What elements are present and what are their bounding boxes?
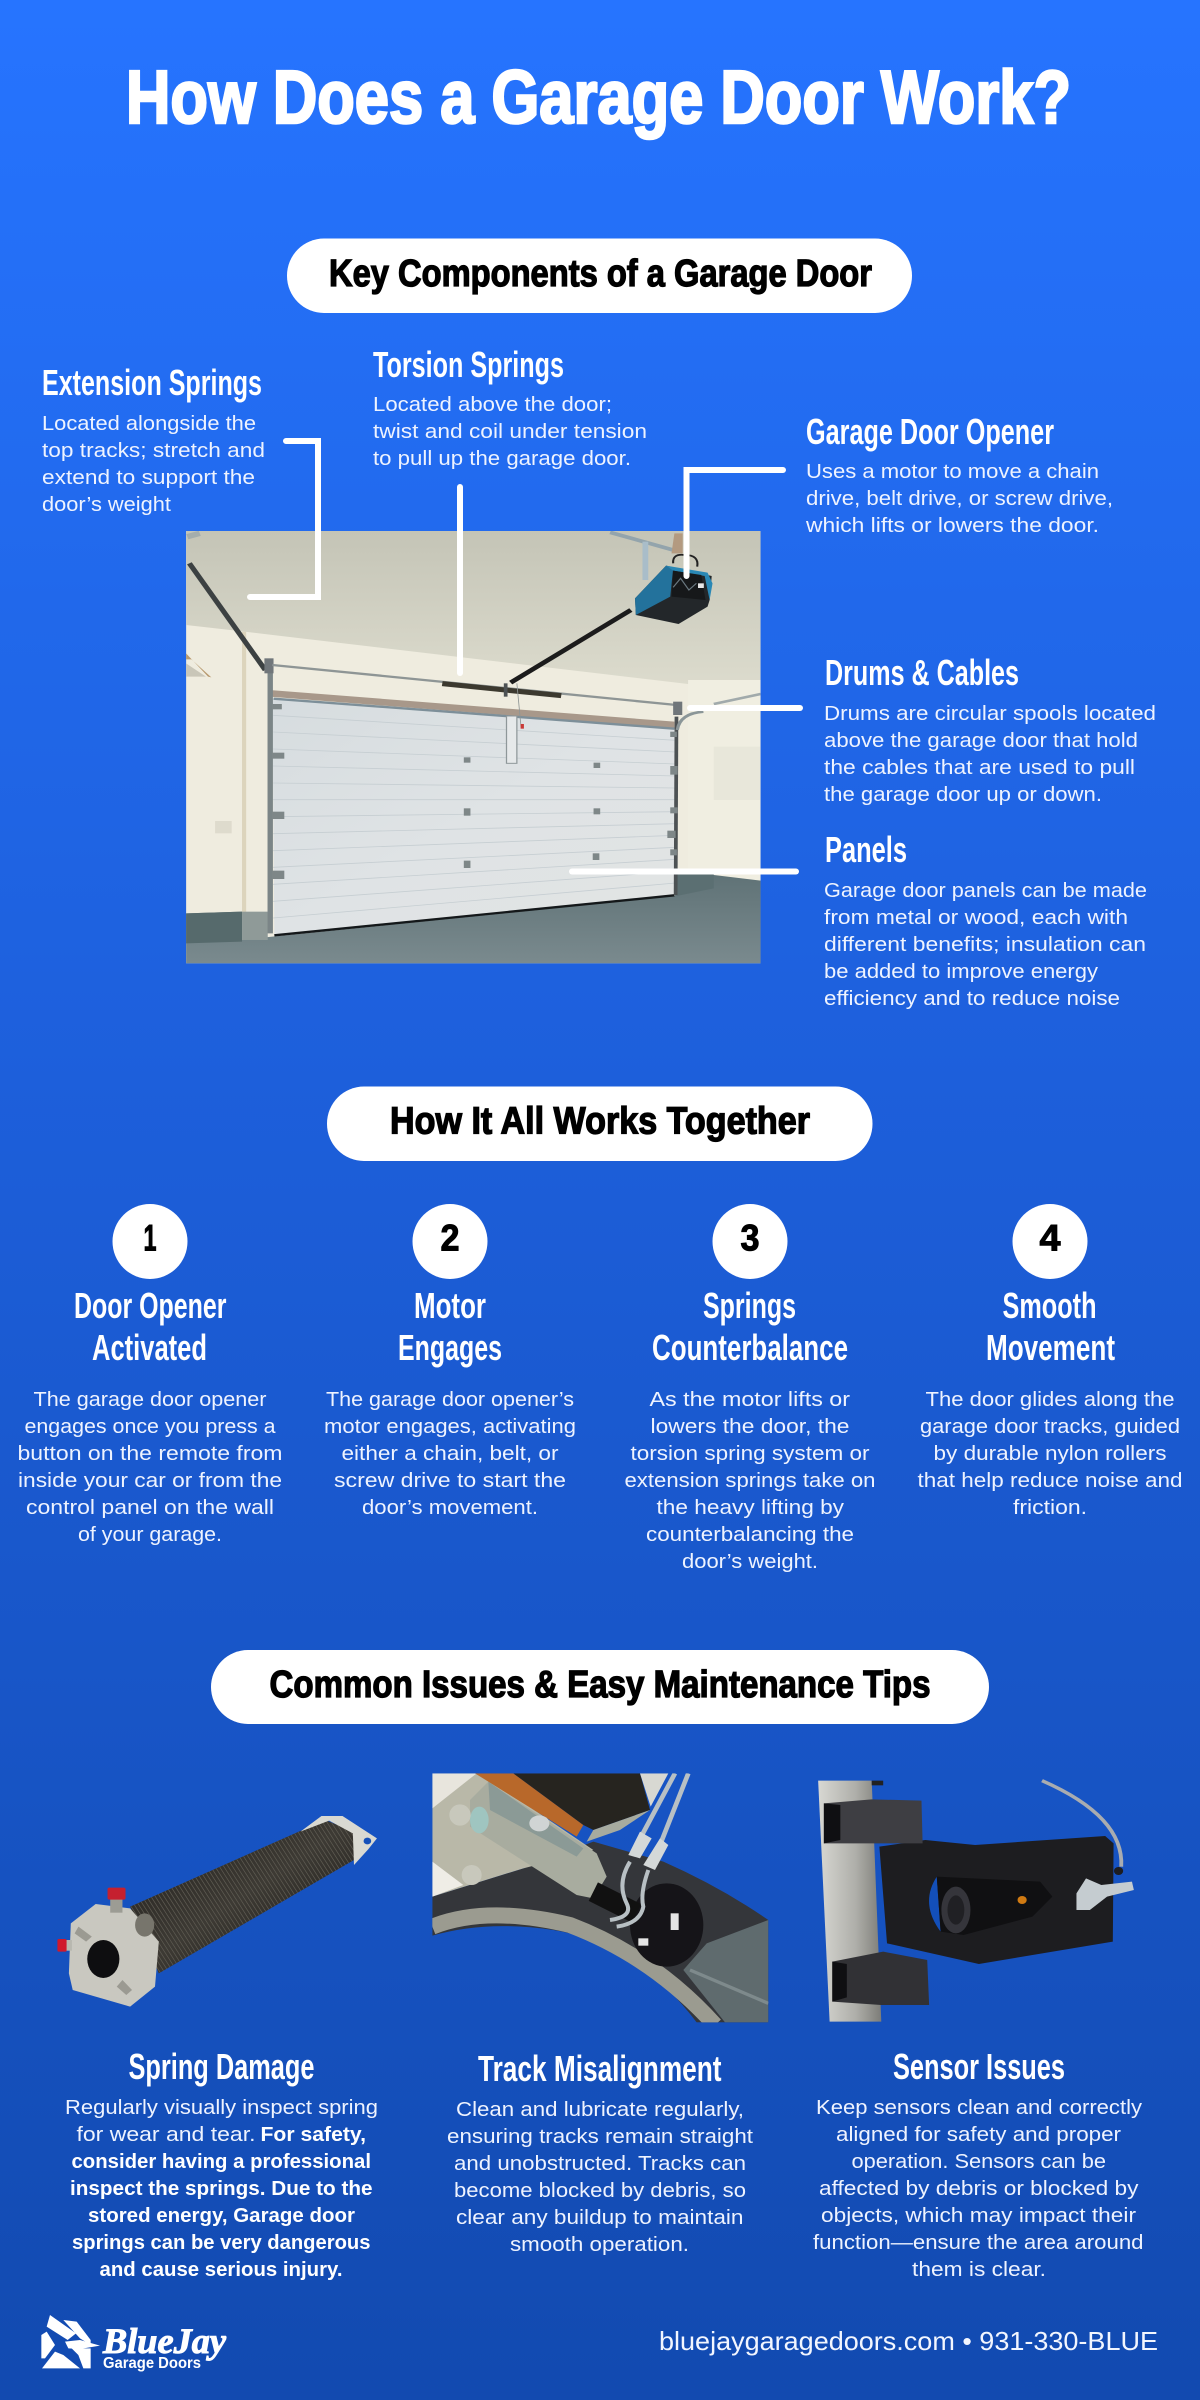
step 1 text: button on the remote from bbox=[18, 1443, 282, 1465]
tip: spring damage: inspect the springs. Due to the bbox=[70, 2178, 372, 2200]
step 2 text: screw drive to start the bbox=[334, 1470, 566, 1492]
step 2 heading bbox=[398, 1285, 502, 1368]
step 2 text bbox=[324, 1389, 576, 1519]
component: garage door opener bbox=[805, 411, 1113, 537]
tip: spring damage: Regularly visually inspect spring bbox=[65, 2097, 378, 2119]
tip: sensor issues: Sensor Issues bbox=[893, 2046, 1065, 2087]
component: torsion springs: Torsion Springs bbox=[373, 344, 564, 385]
component: extension springs bbox=[42, 362, 265, 516]
tip: track misalignment: ensuring tracks remain straight bbox=[447, 2126, 753, 2148]
contact line: bluejaygaragedoors.com • 931-330-BLUE bbox=[659, 2326, 1158, 2356]
number badge 4: 4 bbox=[1040, 1218, 1061, 1258]
step 2 text: The garage door opener’s bbox=[326, 1389, 574, 1411]
step 4 text bbox=[918, 1389, 1182, 1519]
tip: spring damage: and cause serious injury. bbox=[100, 2259, 342, 2281]
tip: spring damage: springs can be very dangerous bbox=[72, 2232, 370, 2254]
component: garage door opener: Garage Door Opener bbox=[806, 411, 1054, 452]
photo: safety sensor bbox=[818, 1781, 1134, 2022]
component: panels: Garage door panels can be made bbox=[824, 880, 1147, 902]
tip: track misalignment: Track Misalignment bbox=[478, 2048, 722, 2089]
number badge 3: 3 bbox=[740, 1218, 760, 1258]
number badge 4 bbox=[1012, 1204, 1088, 1279]
step 2 heading: Motor bbox=[414, 1285, 486, 1326]
step 3 text: door’s weight. bbox=[682, 1551, 818, 1573]
photo: torsion spring bbox=[57, 1816, 377, 2007]
tip: track misalignment: Clean and lubricate regularly, bbox=[456, 2099, 744, 2121]
component: panels: be added to improve energy bbox=[824, 961, 1098, 983]
step 2 text: either a chain, belt, or bbox=[342, 1443, 559, 1465]
icon: blue jay bird bbox=[41, 2315, 100, 2368]
step 2 bbox=[324, 1204, 576, 1519]
number badge 3 bbox=[712, 1204, 788, 1279]
step 4 text: friction. bbox=[1013, 1497, 1087, 1519]
logo wordmark: Garage Doors bbox=[103, 2355, 201, 2372]
component: drums and cables bbox=[824, 652, 1156, 806]
step 4 text: that help reduce noise and bbox=[918, 1470, 1182, 1492]
tip: track misalignment bbox=[447, 2048, 753, 2256]
step 3 bbox=[624, 1204, 876, 1573]
heading pill: how it all works together: How It All Works Together bbox=[390, 1100, 810, 1142]
step 1 text bbox=[18, 1389, 282, 1546]
number badge 1: 1 bbox=[144, 1218, 156, 1258]
callout line: torsion springs bbox=[457, 487, 463, 673]
tip: spring damage: for wear and tear. bbox=[76, 2124, 256, 2146]
heading pill: how it all works together bbox=[327, 1086, 872, 1161]
step 2 heading: Engages bbox=[398, 1327, 502, 1368]
tip: spring damage: For safety, bbox=[260, 2124, 366, 2146]
heading pill: common issues: Common Issues & Easy Maintenance Tips bbox=[270, 1664, 930, 1706]
component: extension springs: extend to support the bbox=[42, 467, 255, 489]
component: extension springs: Located alongside the bbox=[42, 413, 256, 435]
step 3 text: counterbalancing the bbox=[646, 1524, 854, 1546]
step 1 heading: Door Opener bbox=[74, 1285, 226, 1326]
component: drums and cables: Drums are circular spools located bbox=[824, 703, 1156, 725]
component: torsion springs bbox=[373, 344, 647, 470]
component: garage door opener: Uses a motor to move a chain bbox=[806, 461, 1099, 483]
component: torsion springs: to pull up the garage door. bbox=[373, 448, 631, 470]
tip: track misalignment: become blocked by debris, so bbox=[454, 2180, 746, 2202]
step 3 text: extension springs take on bbox=[624, 1470, 876, 1492]
step 1 text: of your garage. bbox=[78, 1524, 222, 1546]
tip: sensor issues: operation. Sensors can be bbox=[852, 2151, 1106, 2173]
tip: spring damage: stored energy, Garage door bbox=[88, 2205, 355, 2227]
tip: sensor issues: Keep sensors clean and correctly bbox=[816, 2097, 1142, 2119]
callout line: panels bbox=[572, 868, 796, 874]
callout line: garage door opener bbox=[686, 470, 783, 576]
photo: track and roller bbox=[432, 1773, 768, 2025]
step 1 text: engages once you press a bbox=[24, 1416, 276, 1438]
component: panels: efficiency and to reduce noise bbox=[824, 988, 1120, 1010]
step 2 text: motor engages, activating bbox=[324, 1416, 576, 1438]
tip: sensor issues: them is clear. bbox=[912, 2259, 1046, 2281]
step 4 heading: Smooth bbox=[1002, 1285, 1096, 1326]
component: panels: from metal or wood, each with bbox=[824, 907, 1128, 929]
logo: Blue Jay Garage Doors bbox=[41, 2315, 227, 2372]
component: extension springs: door’s weight bbox=[42, 494, 171, 516]
step 4 heading bbox=[986, 1285, 1115, 1368]
number badge 2 bbox=[412, 1204, 488, 1279]
tip: sensor issues: objects, which may impact their bbox=[821, 2205, 1136, 2227]
number badge 1 bbox=[112, 1204, 188, 1279]
component: garage door opener: drive, belt drive, or screw drive, bbox=[806, 488, 1113, 510]
callout line: extension springs bbox=[250, 441, 318, 597]
step 1 heading: Activated bbox=[92, 1327, 207, 1368]
tip: sensor issues: affected by debris or blocked by bbox=[819, 2178, 1138, 2200]
step 4 text: garage door tracks, guided bbox=[920, 1416, 1180, 1438]
step 1 text: inside your car or from the bbox=[18, 1470, 282, 1492]
component: garage door opener: which lifts or lowers the door. bbox=[805, 515, 1099, 537]
heading pill: key components: Key Components of a Garage Door bbox=[329, 253, 872, 295]
tip: track misalignment: and unobstructed. Tracks can bbox=[454, 2153, 746, 2175]
tip: spring damage bbox=[65, 2046, 378, 2281]
step 2 text: door’s movement. bbox=[362, 1497, 538, 1519]
step 3 text: As the motor lifts or bbox=[650, 1389, 850, 1411]
tip: track misalignment: clear any buildup to maintain bbox=[456, 2207, 744, 2229]
step 3 heading bbox=[652, 1285, 848, 1368]
tip: sensor issues bbox=[813, 2046, 1144, 2281]
step 3 heading: Counterbalance bbox=[652, 1327, 848, 1368]
logo wordmark: BlueJay bbox=[102, 2321, 227, 2361]
step 3 text bbox=[624, 1389, 876, 1573]
callout line: drums and cables bbox=[690, 705, 800, 711]
tip: spring damage: Spring Damage bbox=[128, 2046, 314, 2087]
tip: sensor issues: aligned for safety and proper bbox=[836, 2124, 1121, 2146]
component: torsion springs: Located above the door; bbox=[373, 394, 612, 416]
component: panels: Panels bbox=[825, 829, 907, 870]
step 4 bbox=[918, 1204, 1182, 1519]
step 1 bbox=[18, 1204, 282, 1546]
tip: sensor issues: function—ensure the area around bbox=[813, 2232, 1144, 2254]
step 4 text: The door glides along the bbox=[926, 1389, 1174, 1411]
component: drums and cables: above the garage door that hold bbox=[824, 730, 1138, 752]
step 3 text: lowers the door, the bbox=[650, 1416, 850, 1438]
step 3 text: torsion spring system or bbox=[630, 1443, 870, 1465]
component: drums and cables: Drums & Cables bbox=[825, 652, 1019, 693]
component: extension springs: Extension Springs bbox=[42, 362, 262, 403]
component: panels: different benefits; insulation can bbox=[824, 934, 1146, 956]
tip: track misalignment: smooth operation. bbox=[510, 2234, 689, 2256]
component: drums and cables: the garage door up or down. bbox=[824, 784, 1102, 806]
number badge 2: 2 bbox=[440, 1218, 460, 1258]
step 1 text: The garage door opener bbox=[34, 1389, 267, 1411]
step 3 text: the heavy lifting by bbox=[656, 1497, 844, 1519]
step 4 heading: Movement bbox=[986, 1327, 1115, 1368]
heading pill: common issues bbox=[211, 1650, 989, 1724]
component: extension springs: top tracks; stretch and bbox=[42, 440, 265, 462]
component: torsion springs: twist and coil under tension bbox=[373, 421, 647, 443]
heading pill: key components bbox=[287, 238, 912, 313]
step 3 heading: Springs bbox=[703, 1285, 796, 1326]
step 4 text: by durable nylon rollers bbox=[934, 1443, 1166, 1465]
component: panels bbox=[824, 829, 1147, 1010]
tip: spring damage: consider having a professional bbox=[72, 2151, 371, 2173]
step 1 heading bbox=[74, 1285, 226, 1368]
component: drums and cables: the cables that are used to pull bbox=[824, 757, 1135, 779]
photo: garage door interior bbox=[186, 531, 761, 963]
step 1 text: control panel on the wall bbox=[26, 1497, 274, 1519]
